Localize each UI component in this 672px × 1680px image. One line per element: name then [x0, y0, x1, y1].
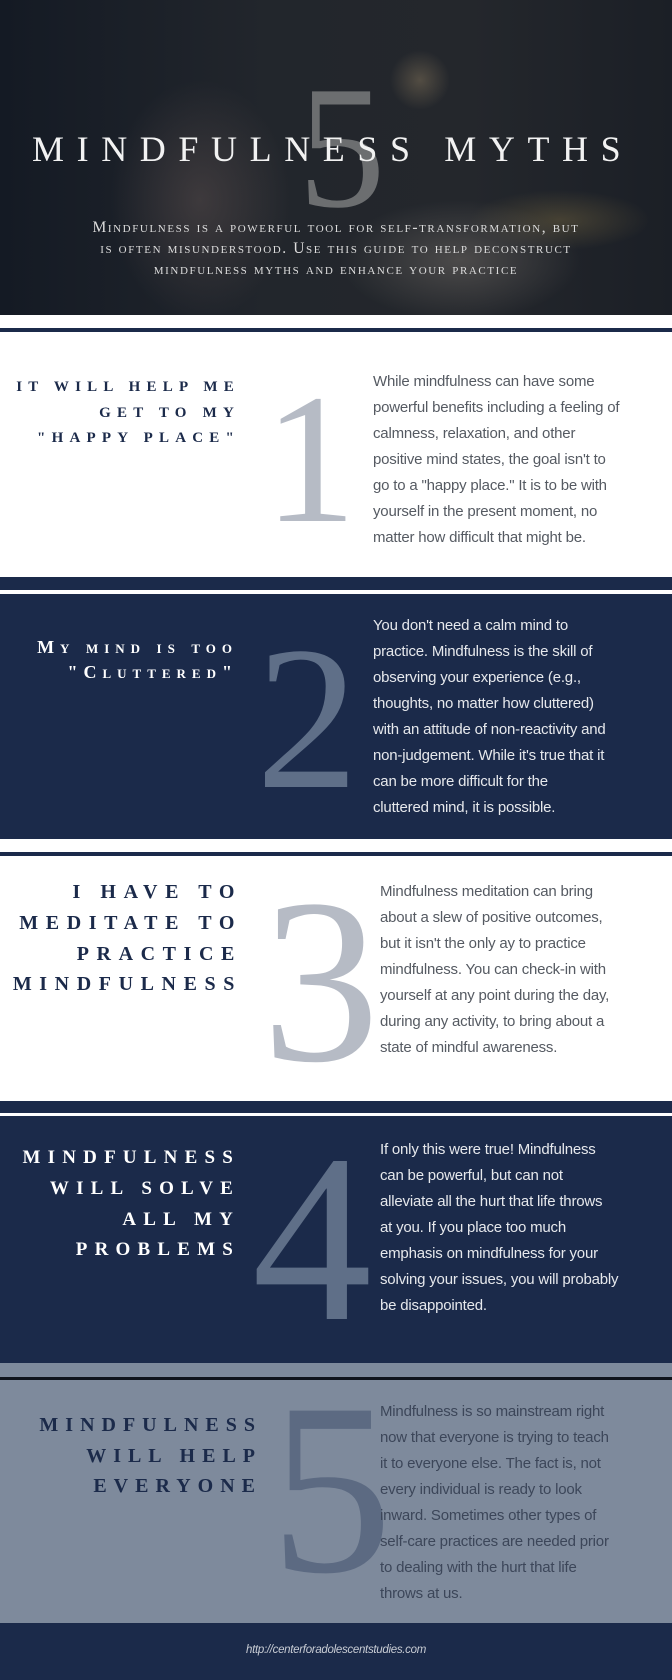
subtitle: mindfulness myths and enhance your practice [154, 261, 518, 278]
text 2: cluttered mind, it is possible. [373, 799, 555, 816]
text 1: matter how difficult that might be. [373, 529, 586, 546]
heading 3: MINDFULNESS [13, 973, 242, 995]
panel: myth 2 [0, 594, 672, 839]
text 4: emphasis on mindfulness for your [380, 1245, 598, 1262]
subtitle: Mindfulness is a powerful tool for self-transformation, but [92, 219, 580, 236]
heading 5 [39, 1414, 262, 1497]
text 3: state of mindful awareness. [380, 1039, 557, 1056]
text 1: positive mind states, the goal isn't to [373, 451, 606, 468]
text 3: yourself at any point during the day, [380, 987, 609, 1004]
heading 3: PRACTICE [77, 943, 242, 965]
text 2: observing your experience (e.g., [373, 669, 581, 686]
text 5: to dealing with the hurt that life [380, 1559, 577, 1576]
heading 3: I HAVE TO [72, 881, 242, 903]
heading 4: PROBLEMS [76, 1239, 240, 1260]
text 5: self-care practices are needed prior [380, 1533, 609, 1550]
text 2 [373, 617, 606, 816]
text 5: now that everyone is trying to teach [380, 1429, 609, 1446]
text 2: with an attitude of non-reactivity and [373, 721, 606, 738]
heading 2 [37, 637, 238, 682]
text 2: can be more difficult for the [373, 773, 548, 790]
panel: myth 1 [0, 333, 672, 577]
heading 1: "HAPPY PLACE" [37, 430, 240, 446]
text 3 [380, 883, 609, 1056]
heading 2: My mind is too [37, 637, 238, 657]
heading 1 [16, 379, 240, 446]
panel: myth 4 [0, 1116, 672, 1363]
footer [0, 1623, 672, 1680]
text 1: yourself in the present moment, no [373, 503, 597, 520]
text 2: practice. Mindfulness is the skill of [373, 643, 592, 660]
heading 4 [22, 1147, 240, 1260]
text 5: it to everyone else. The fact is, not [380, 1455, 601, 1472]
text 1: go to a "happy place." It is to be with [373, 477, 607, 494]
text 2: non-judgement. While it's true that it [373, 747, 604, 764]
text 3: but it isn't the only ay to practice [380, 935, 586, 952]
text 1: While mindfulness can have some [373, 373, 594, 390]
text 2: You don't need a calm mind to [373, 617, 568, 634]
text 1: powerful benefits including a feeling of [373, 399, 619, 416]
title: MINDFULNESS MYTHS [32, 129, 633, 169]
number 4: 4 [252, 1105, 372, 1371]
panel: myth 3 [0, 856, 672, 1101]
heading 3 [13, 881, 242, 995]
heading 1: GET TO MY [99, 404, 240, 420]
big 5 behind title: 5 [298, 50, 386, 244]
subtitle: is often misunderstood. Use this guide to help deconstruct [100, 240, 572, 257]
heading 2: "Cluttered" [67, 662, 238, 682]
text 4: If only this were true! Mindfulness [380, 1141, 596, 1158]
heading 4: MINDFULNESS [22, 1147, 240, 1168]
footer url: http://centerforadolescentstudies.com [246, 1644, 426, 1656]
text 4 [380, 1141, 618, 1314]
text 5: Mindfulness is so mainstream right [380, 1403, 604, 1420]
text 3: about a slew of positive outcomes, [380, 909, 602, 926]
text 5: inward. Sometimes other types of [380, 1507, 596, 1524]
header [0, 0, 672, 315]
text 5: throws at us. [380, 1585, 462, 1602]
text 1 [373, 373, 620, 546]
panel: myth 5 [0, 1380, 672, 1623]
number 5: 5 [270, 1353, 392, 1624]
number 1: 1 [264, 357, 356, 562]
text 4: at you. If you place too much [380, 1219, 566, 1236]
text 3: mindfulness. You can check-in with [380, 961, 606, 978]
heading 5: WILL HELP [86, 1444, 262, 1466]
heading 4: WILL SOLVE [50, 1178, 240, 1199]
heading 3: MEDITATE TO [19, 912, 242, 934]
text 5 [380, 1403, 609, 1602]
number 2: 2 [256, 605, 358, 832]
heading 5: EVERYONE [93, 1475, 262, 1497]
text 4: solving your issues, you will probably [380, 1271, 618, 1288]
subtitle [92, 219, 580, 278]
number 3: 3 [262, 851, 380, 1111]
text 1: calmness, relaxation, and other [373, 425, 575, 442]
text 4: alleviate all the hurt that life throws [380, 1193, 602, 1210]
text 3: during any activity, to bring about a [380, 1013, 604, 1030]
text 4: can be powerful, but can not [380, 1167, 563, 1184]
heading 5: MINDFULNESS [39, 1414, 262, 1436]
text 3: Mindfulness meditation can bring [380, 883, 593, 900]
text 5: every individual is ready to look [380, 1481, 582, 1498]
text 2: thoughts, no matter how cluttered) [373, 695, 594, 712]
heading 4: ALL MY [122, 1209, 240, 1230]
text 4: be disappointed. [380, 1297, 487, 1314]
heading 1: IT WILL HELP ME [16, 379, 240, 395]
